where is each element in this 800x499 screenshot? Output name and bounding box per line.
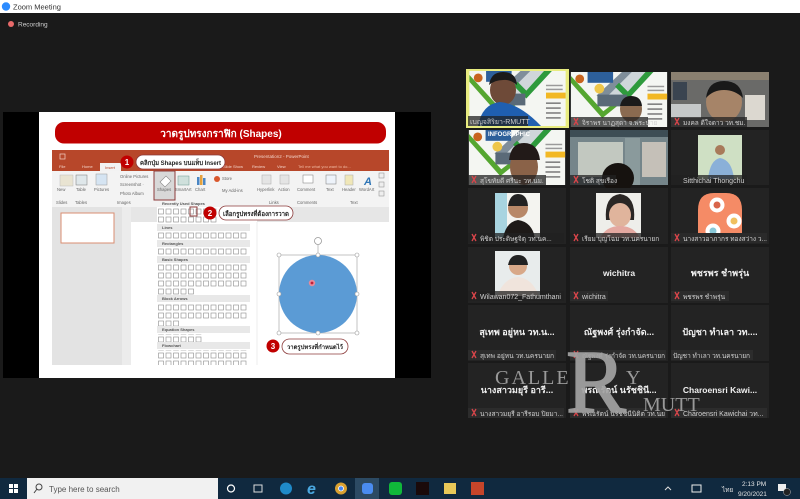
- tile 12: [671, 247, 769, 303]
- tile 5: โชติ สุขเรือง: [582, 177, 617, 185]
- tile 9: [671, 188, 769, 244]
- tile 14: [570, 305, 668, 361]
- icon: powerpoint: [471, 482, 484, 495]
- ribbon tools: Photo Album: [120, 191, 144, 196]
- callout 3: 3: [271, 342, 276, 351]
- ribbon tools: Comments: [297, 200, 317, 205]
- tile 16: [468, 363, 566, 418]
- tile 18: [671, 363, 769, 418]
- ribbon tools: Shapes: [157, 187, 171, 192]
- ribbon tools: Tables: [75, 200, 87, 205]
- tile 4: สุโขทัยดี ศรีนะ วท.นม.: [480, 177, 544, 185]
- icon: cortana: [228, 485, 234, 492]
- recording indicator: [8, 21, 48, 28]
- panel: powerpoint window: Slide Show: [223, 164, 243, 169]
- tile 8: [570, 188, 668, 244]
- callout 1: คลิกปุ่ม Shapes บนแท็บ Insert: [140, 158, 222, 167]
- callout 1: 1: [125, 158, 130, 167]
- tile 8: เรียม บุญโฉม วท.นครนายก: [582, 235, 659, 243]
- tile 4: [468, 130, 565, 185]
- ribbon tools: Links: [269, 200, 279, 205]
- watermark: Gallery RMUTT: MUTT: [643, 394, 700, 416]
- watermark: Gallery RMUTT: Y: [626, 367, 640, 389]
- ribbon tools: Online Pictures: [120, 174, 148, 179]
- ribbon tools: Hyperlink: [257, 187, 275, 192]
- tile 9: นางสาวอาภากร ทองสว่าง ว...: [683, 236, 767, 243]
- ribbon tools: Pictures: [94, 187, 109, 192]
- callout 2: เลือกรูปทรงที่ต้องการวาด: [223, 208, 289, 219]
- tile 17: [570, 363, 668, 418]
- blue circle shape with handles: [277, 238, 359, 335]
- tile 1: [466, 69, 569, 128]
- tile 15: [671, 305, 769, 361]
- panel: powerpoint window: Review: [252, 164, 265, 169]
- icon: task view: [254, 485, 262, 492]
- shapes gallery: Flowchart: [162, 343, 182, 348]
- ribbon title bar: [52, 150, 389, 171]
- tile 17: พรณรัตน์ นรัชชินี...: [581, 384, 657, 395]
- tile 10: Wilawan072_Fathumthani: [480, 294, 561, 301]
- tile 11: wichitra: [581, 294, 606, 301]
- tile 18: Charoensri Kawi...: [683, 385, 757, 395]
- icon: line: [389, 482, 402, 495]
- tile 5: [570, 130, 668, 193]
- ribbon tools: WordArt: [359, 187, 375, 192]
- search box: [27, 478, 218, 499]
- tile 16: นางสาวมยุรี อารี...: [481, 385, 553, 396]
- system tray: [665, 481, 790, 498]
- tile 6: [671, 130, 769, 185]
- muted microphone icons: [472, 118, 679, 416]
- system tray: 2:13 PM: [742, 481, 766, 488]
- slide title: [55, 122, 386, 144]
- shapes gallery: Equation Shapes: [162, 327, 195, 332]
- panel: shared screen: [3, 112, 431, 378]
- search box: Type here to search: [49, 485, 120, 494]
- tile 6: Sitthichai Thongchu: [683, 178, 744, 185]
- ribbon tools: My Add-ins: [222, 188, 243, 193]
- tile 13: [468, 305, 566, 361]
- icon: internet explorer: e: [307, 481, 316, 498]
- tile 17: พรณรัตน์ นรัชชินีนิติต วท.นย: [582, 410, 665, 418]
- slide title: วาดรูปทรงกราฟิก (Shapes): [160, 128, 282, 141]
- icon: zoom logo: [2, 2, 10, 11]
- icon: chrome: [335, 482, 347, 494]
- watermark: Gallery RMUTT: GALLE: [495, 367, 571, 389]
- icon: red app: [416, 482, 429, 495]
- shapes gallery: Rectangles: [162, 241, 184, 246]
- shapes gallery: Block Arrows: [162, 296, 188, 301]
- callout 1: [120, 155, 225, 169]
- tile 7: [468, 188, 566, 244]
- callout 2: 2: [208, 209, 213, 218]
- panel: powerpoint window: Home: [82, 164, 93, 169]
- tile 3: [671, 72, 769, 127]
- icon: edge: [280, 482, 292, 494]
- panel: powerpoint window: View: [277, 164, 286, 169]
- left slide pane: [52, 207, 131, 365]
- callout 3: วาดรูปทรงที่กำหนดไว้: [287, 342, 344, 352]
- icon: zoom active: [355, 478, 379, 499]
- system tray: 9/20/2021: [738, 491, 767, 498]
- panel: windows taskbar: [0, 478, 800, 499]
- tile 11: wichitra: [602, 268, 635, 278]
- tile 14: ณัฐพงศ์ รุ่งกำจัด วท.นครนายก: [582, 352, 665, 360]
- tile 14: ณัฐพงศ์ รุ่งกำจัด...: [584, 326, 654, 338]
- panel: powerpoint window: Insert: [105, 165, 116, 170]
- ribbon tools: Images: [117, 200, 131, 205]
- icon: explorer: [444, 483, 456, 494]
- ribbon tools: [52, 171, 389, 222]
- ribbon tools: Text: [326, 187, 335, 192]
- tile 1: เบญจสิริยา-RMUTT: [470, 118, 531, 126]
- panel: participant gallery: [466, 69, 769, 418]
- panel: powerpoint window: File: [59, 164, 66, 169]
- shapes gallery: Lines: [162, 225, 173, 230]
- ribbon tools: New: [57, 187, 66, 192]
- shapes gallery: Recently Used Shapes: [162, 201, 206, 206]
- tile 2: จิราพร นาฏสุดา จ.พระนาย: [582, 119, 658, 127]
- ribbon tools: Chart: [195, 187, 206, 192]
- ribbon tools: Store: [222, 176, 233, 181]
- ribbon tools: Slides: [56, 200, 67, 205]
- callout 2: [204, 206, 293, 220]
- tile 3: มงคล ดีใจดาว วท.ชม.: [683, 119, 746, 127]
- callout 3: [266, 339, 348, 354]
- tile 15: ปัญชา ทำเลา วท....: [682, 327, 758, 338]
- tile 18: Charoensri Kawichai วท...: [683, 411, 764, 418]
- title bar: [0, 0, 800, 13]
- tile 15: ปัญชา ทำเลา วท.นครนายก: [673, 352, 750, 360]
- tile 10: [468, 247, 566, 303]
- tile 12: พชรพร ชำพรุ่น: [683, 293, 726, 301]
- watermark: Gallery RMUTT: R: [566, 333, 626, 432]
- window title: Zoom Meeting: [13, 2, 61, 12]
- watermark: Gallery RMUTT: [495, 333, 700, 432]
- tile 12: พชรพร ชำพรุ่น: [691, 268, 750, 279]
- tile 4: INFOGRAPHIC: [488, 132, 531, 138]
- tile 13: สุเทพ อยู่หน วท.นครนายก: [480, 353, 554, 360]
- system tray: ไทย: [721, 486, 734, 494]
- recording indicator: Recording: [18, 22, 48, 28]
- shapes gallery: Basic Shapes: [162, 257, 189, 262]
- ribbon tools: A: [363, 176, 372, 188]
- tile 13: สุเทพ อยู่หน วท.น...: [479, 327, 555, 338]
- ribbon tools: Header: [342, 187, 356, 192]
- ribbon tools: Action: [278, 187, 290, 192]
- ribbon tools: Text: [350, 200, 359, 205]
- panel: powerpoint window: [52, 150, 389, 365]
- tile 16: นางสาวมยุรี อารีรอบ ปิยมา...: [480, 410, 563, 418]
- icon: windows start: [9, 484, 18, 493]
- ribbon tools: Screenshot ·: [120, 182, 144, 187]
- ribbon tools: Comment: [297, 187, 316, 192]
- shapes gallery: [157, 201, 257, 365]
- panel: powerpoint window: Tell me what you want to do...: [298, 164, 351, 169]
- panel: powerpoint window: Presentation2 - PowerPoint: [254, 154, 310, 159]
- tile 11: [570, 247, 668, 303]
- ribbon tools: SmartArt: [175, 187, 192, 192]
- tile 7: พิชิต ประดิษฐจิตุ วท.นค...: [480, 235, 552, 243]
- tile 2: [570, 72, 667, 127]
- ribbon tools: Table: [76, 187, 87, 192]
